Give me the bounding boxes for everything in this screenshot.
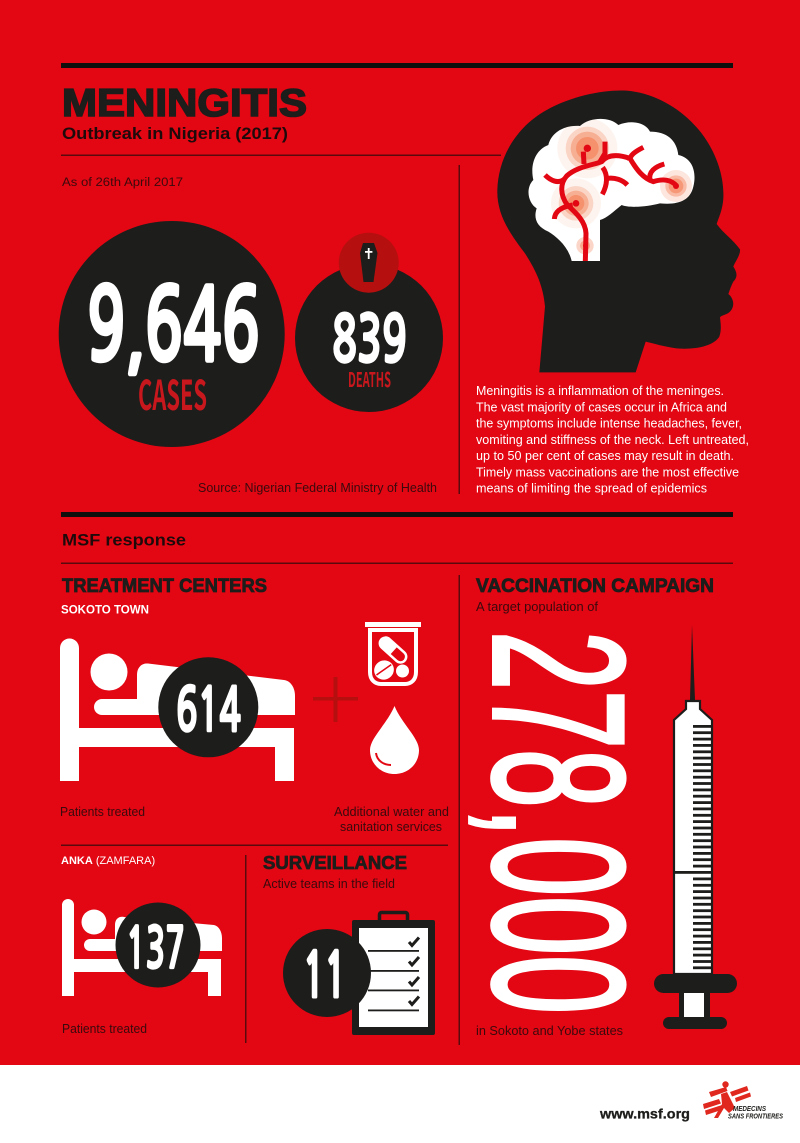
label: water and sanitation: Additional water and	[334, 805, 449, 819]
panel: treatment centers heading: TREATMENT CENTERS	[62, 575, 267, 597]
location label: Anka (Zamfara): ANKA (ZAMFARA)	[61, 855, 155, 867]
icon: small hospital bed with 137	[62, 899, 222, 996]
label: active teams: Active teams in the field	[263, 877, 395, 891]
stat: deaths circle: DEATHS	[348, 363, 391, 393]
label: Sokoto and Yobe: in Sokoto and Yobe states	[476, 1024, 623, 1038]
stat: deaths circle: 839	[332, 308, 407, 372]
subtitle: Outbreak in Nigeria (2017)	[62, 124, 288, 143]
label: water and sanitation	[334, 805, 449, 834]
stat: cases circle	[59, 221, 285, 447]
description text: means of limiting the spread of epidemics	[476, 482, 707, 496]
footer band	[0, 1065, 800, 1143]
label: target population: A target population of	[476, 600, 599, 614]
description text: vomiting and stiffness of the neck. Left untreated,	[476, 433, 749, 447]
label: patients treated Sokoto: Patients treated	[60, 805, 145, 819]
icon: coffin	[339, 233, 399, 293]
stat: deaths circle	[295, 233, 443, 412]
description text	[476, 384, 749, 496]
stat: cases circle: 9,646	[87, 276, 260, 376]
website: www.msf.org	[599, 1106, 690, 1122]
title: MENINGITIS	[62, 82, 307, 125]
stat: cases circle: CASES	[138, 362, 207, 422]
logo wordmark: MEDECINS	[733, 1104, 766, 1113]
heading: surveillance: SURVEILLANCE	[263, 853, 407, 873]
logo: MSF running man	[703, 1081, 751, 1118]
logo wordmark: SANS FRONTIERES	[728, 1112, 783, 1120]
description text: up to 50 per cent of cases may result in death.	[476, 449, 734, 463]
icon: water drop	[370, 706, 419, 774]
icon: clipboard with 11	[283, 912, 435, 1035]
icon: small hospital bed with 137: 137	[126, 922, 185, 977]
logo wordmark	[728, 1104, 783, 1120]
icon: clipboard with 11: 11	[303, 947, 346, 1007]
date note: As of 26th April 2017	[62, 177, 183, 189]
label: water and sanitation: sanitation services	[340, 820, 442, 834]
source note: Source: Nigerian Federal Ministry of Health	[198, 481, 437, 495]
icon: syringe	[654, 625, 737, 1029]
icon: plus	[313, 677, 358, 722]
icon: hospital bed with 614: 614	[176, 681, 241, 740]
icon: medicine jar	[365, 622, 421, 684]
label: patients treated Anka: Patients treated	[62, 1022, 147, 1036]
description text: the symptoms include intense headaches, fever,	[476, 417, 742, 431]
icon: hospital bed with 614	[60, 639, 295, 781]
heading: vaccination campaign: VACCINATION CAMPAIGN	[476, 576, 714, 597]
description text: The vast majority of cases occur in Africa and	[476, 400, 727, 414]
heading: MSF response: MSF response	[62, 530, 186, 550]
description text: Meningitis is a inflammation of the meninges.	[476, 384, 724, 398]
illustration: head with inflamed brain	[497, 90, 740, 372]
description text: Timely mass vaccinations are the most effective	[476, 466, 739, 480]
location label: Sokoto Town: SOKOTO TOWN	[61, 604, 149, 616]
